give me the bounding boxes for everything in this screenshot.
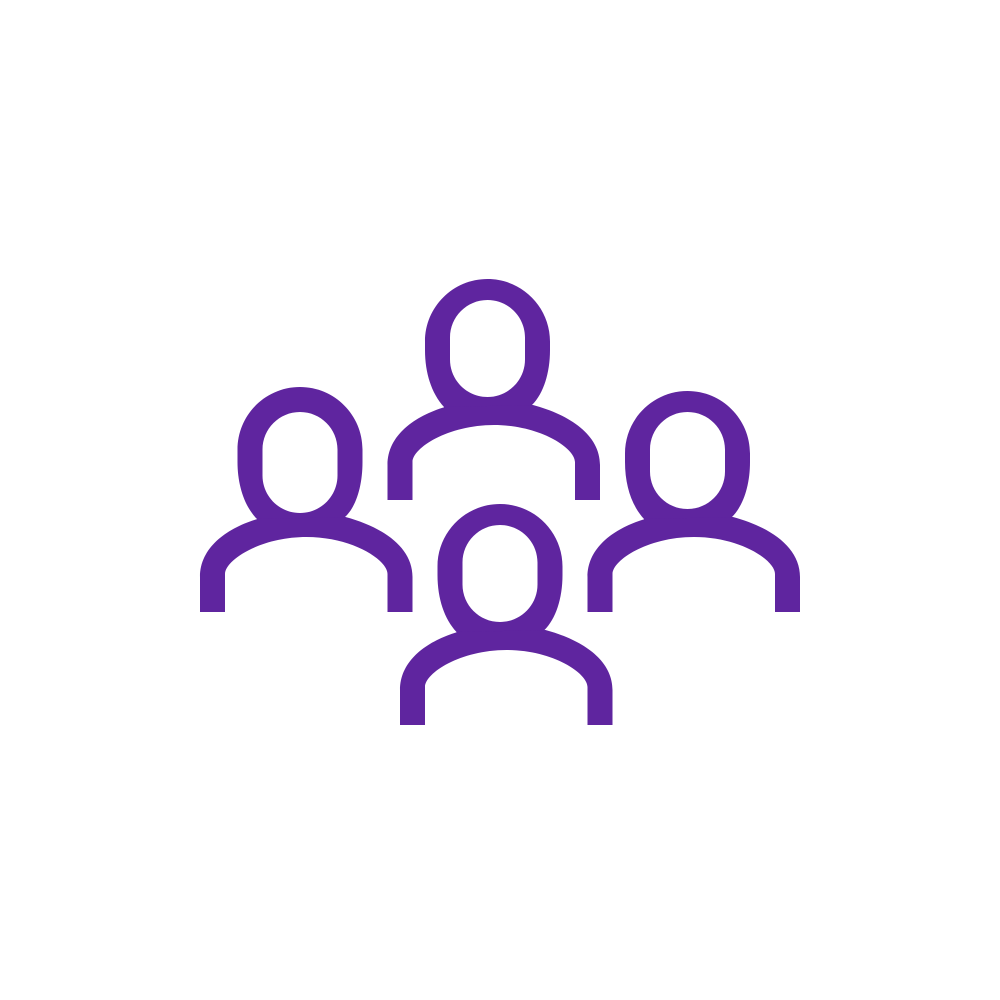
icon: person right [588,391,800,612]
icon: person left [200,387,412,612]
icon: person top [388,279,600,500]
icon: person bottom [400,504,612,725]
